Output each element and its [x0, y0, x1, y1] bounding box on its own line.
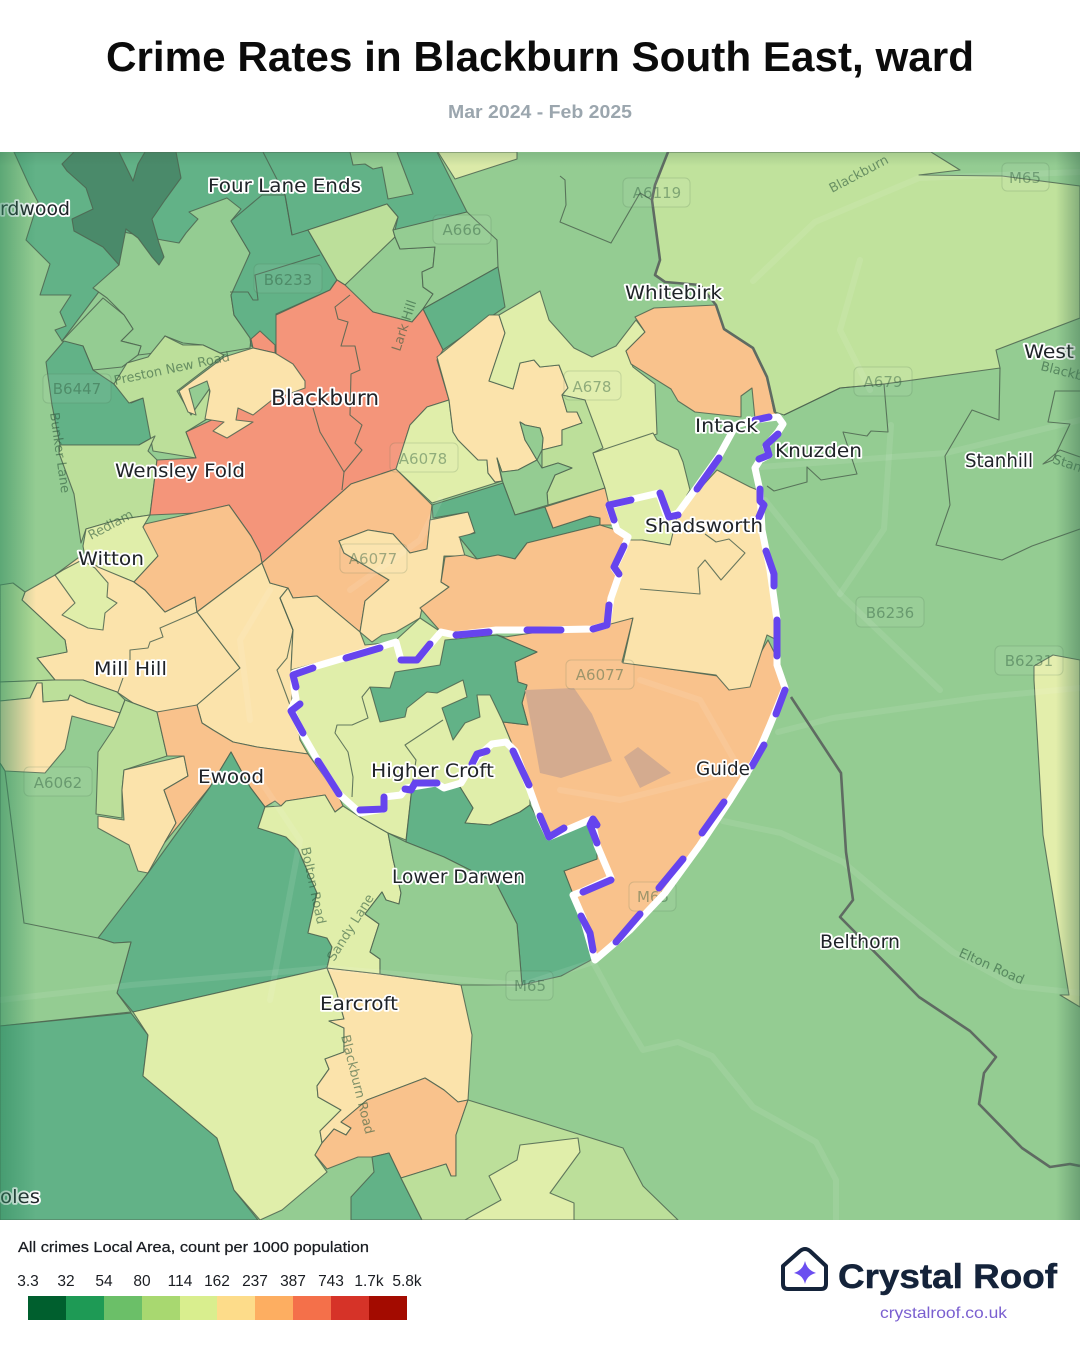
road shields: A679 [864, 373, 902, 391]
light roads [0, 172, 1080, 1220]
industrial patches [525, 688, 671, 788]
place labels: oles [0, 1186, 40, 1208]
legend scale numbers: 237 [242, 1273, 268, 1290]
district boundary line [652, 152, 1080, 1167]
legend scale numbers: 3.3 [17, 1273, 39, 1290]
place labels: Ewood [198, 766, 264, 788]
legend scale numbers: 743 [318, 1273, 344, 1290]
legend title: All crimes Local Area, count per 1000 population [18, 1239, 369, 1256]
road shields: M65 [637, 888, 669, 906]
title: Crime Rates in Blackburn South East, ward [106, 33, 974, 80]
ward outline: purple dashes [291, 417, 785, 950]
place labels: Stanhill [965, 450, 1033, 472]
legend scale numbers [17, 1273, 422, 1290]
place labels: Wensley Fold [115, 460, 245, 482]
road shields: B6231 [1005, 652, 1053, 670]
place labels: Witton [78, 548, 144, 570]
place labels [0, 175, 1074, 1208]
legend scale numbers: 5.8k [392, 1273, 422, 1290]
road shields: M65 [1009, 169, 1041, 187]
place labels: Lower Darwen [392, 866, 525, 888]
place labels: Belthorn [820, 931, 900, 953]
road names: Sandy Lane [325, 892, 378, 964]
icon: house with star [783, 1249, 826, 1289]
place labels: rdwood [0, 198, 70, 220]
subtitle: date range: Mar 2024 - Feb 2025 [448, 102, 632, 122]
road shields: A6062 [34, 774, 82, 792]
place labels: Intack [695, 415, 758, 437]
road shields: B6447 [53, 380, 101, 398]
legend scale numbers: 114 [168, 1273, 193, 1290]
road shields [24, 163, 1063, 1000]
legend [17, 1239, 422, 1320]
legend scale numbers: 54 [95, 1273, 113, 1290]
road shields: M65 [514, 977, 546, 995]
road names: Preston New Road [113, 350, 231, 389]
road shields: A6077 [349, 550, 397, 568]
road names: Blackburn Road [337, 1033, 376, 1136]
road names: Bunker Lane [46, 411, 72, 494]
place labels: Guide [696, 758, 750, 780]
legend scale numbers: 387 [280, 1273, 306, 1290]
place labels: Four Lane Ends [208, 175, 361, 197]
map base [0, 152, 1080, 1220]
road names [46, 153, 1080, 1136]
road shields: A6077 [576, 666, 624, 684]
place labels: West [1024, 341, 1074, 363]
ward outline: Blackburn South East (white) [291, 417, 785, 960]
road names: Lark Hill [390, 298, 420, 353]
neighbourhood regions [0, 152, 1080, 1220]
inner boundary lines [118, 152, 1080, 797]
place labels: Mill Hill [94, 658, 167, 680]
place labels: Whitebirk [625, 282, 722, 304]
logo: Crystal Roof [783, 1249, 1058, 1322]
road names: Elton Road [956, 946, 1026, 988]
legend colour bar [28, 1296, 407, 1320]
road shields: B6236 [866, 604, 914, 622]
legend scale numbers: 32 [57, 1273, 75, 1290]
road shields: A6078 [399, 450, 447, 468]
road shields: A6119 [633, 184, 681, 202]
road shields: A666 [443, 221, 481, 239]
road names: Bolton Road [297, 846, 328, 926]
road shields: B6233 [264, 271, 312, 289]
road names: Blackburn [827, 153, 891, 197]
legend scale numbers: 1.7k [354, 1273, 384, 1290]
road shields: A678 [573, 378, 611, 396]
map edge vignette [0, 152, 1080, 1220]
place labels: Knuzden [775, 440, 862, 462]
website url: crystalroof.co.uk [880, 1305, 1008, 1322]
legend scale numbers: 162 [204, 1273, 230, 1290]
legend scale numbers: 80 [133, 1273, 151, 1290]
place labels: Blackburn [271, 386, 379, 410]
place labels: Earcroft [320, 993, 398, 1015]
place labels: Shadsworth [645, 515, 763, 537]
road names: Redlam [86, 507, 136, 544]
place labels: Higher Croft [371, 760, 494, 782]
logo wordmark: Crystal Roof [838, 1258, 1058, 1296]
choropleth map [0, 152, 1080, 1220]
